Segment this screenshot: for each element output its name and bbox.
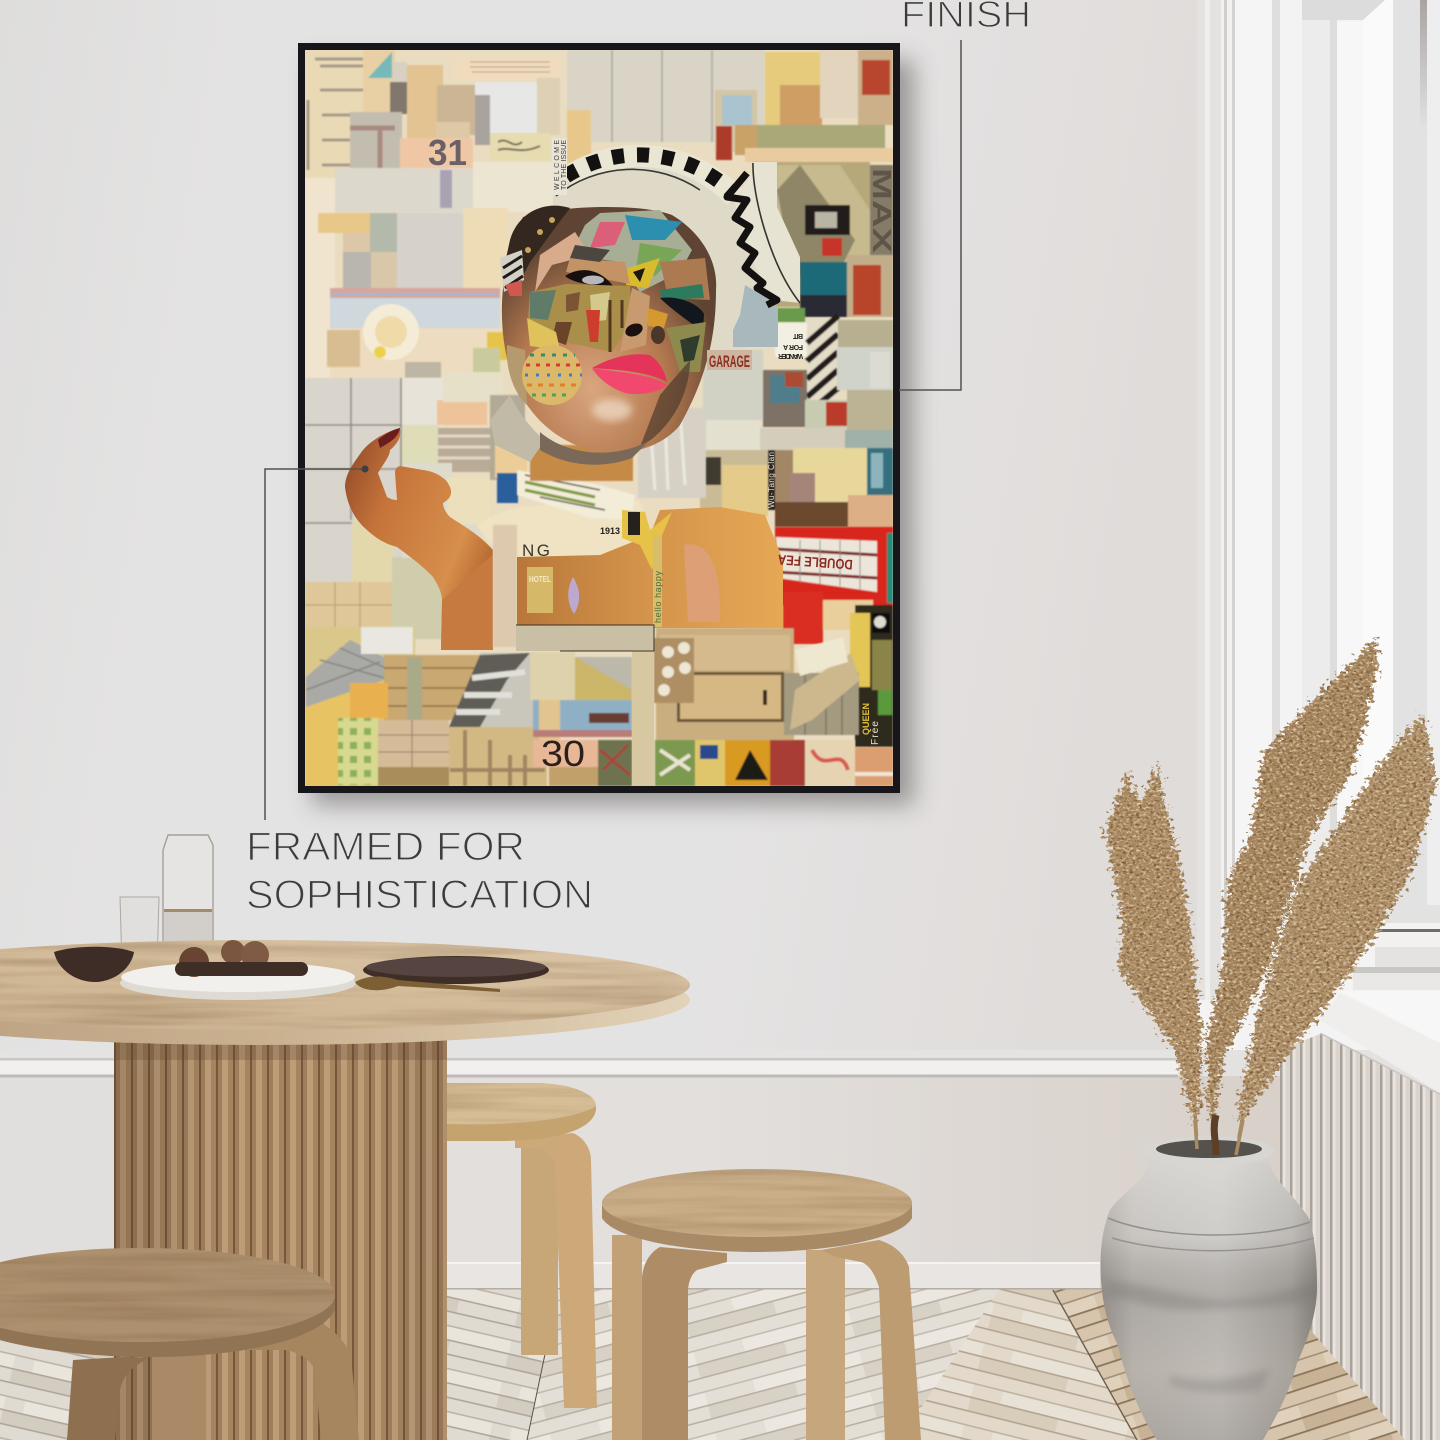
collage: right cog and zigzag teeth [727, 162, 800, 347]
collage artwork clipped to frame [305, 50, 897, 787]
collage: hand [345, 428, 493, 650]
collage: numbers and words: TO THE ISSUE [561, 140, 568, 190]
frond: centre [1205, 637, 1377, 1123]
collage: numbers and words: QUEEN [861, 703, 871, 735]
pampas grass [1105, 637, 1437, 1153]
collage: numbers and words: FOR A [783, 343, 803, 350]
tableware [54, 940, 549, 1000]
left eye [565, 270, 613, 286]
fluted pedestal [114, 1030, 447, 1440]
collage: face portrait [490, 206, 716, 465]
dark plate [363, 956, 549, 984]
collage: numbers and words: NG [522, 541, 550, 560]
front right stool [602, 1169, 921, 1440]
lower wall and rail [0, 1050, 1285, 1290]
frond: right [1237, 713, 1437, 1123]
sprinkle cheek [522, 345, 582, 405]
collage: big cog wheel [553, 145, 768, 368]
nuts [179, 947, 209, 977]
collage: lower band papers [305, 627, 893, 787]
callout: finish [899, 0, 1031, 390]
collage: numbers and words: Wu-Tang Clan [767, 452, 776, 508]
back stool [447, 1083, 597, 1408]
collage: double feature marquee [775, 527, 893, 747]
collage: numbers and words: 31 [428, 132, 467, 173]
radiator [1280, 1034, 1440, 1440]
frond: left [1105, 763, 1202, 1123]
collage: numbers and words [428, 132, 897, 774]
framed collage artwork [298, 43, 900, 793]
bowl [54, 947, 134, 982]
lips [592, 354, 667, 382]
collage: numbers and words: WANDER [778, 352, 803, 359]
marble board [120, 966, 356, 1000]
collage: tiles and left panels [305, 372, 527, 677]
collage: numbers and words: BIT [792, 332, 803, 339]
collage: upper left papers [305, 50, 765, 378]
nose and right eye area [620, 288, 650, 352]
callout: framed for sophistication: SOPHISTICATION [246, 873, 593, 917]
collage: neckline papers [477, 408, 706, 647]
collage: numbers and words: 1913 [600, 526, 620, 536]
glass pitcher and tumbler [120, 835, 213, 967]
collage: numbers and words: MAX [867, 168, 897, 254]
ceramic vase [1101, 1115, 1317, 1440]
front left stool [0, 1248, 359, 1440]
callout: framed for sophistication: FRAMED FOR [246, 825, 525, 869]
graffiti forehead mosaic [570, 210, 692, 292]
collage: numbers and words: DOUBLE FEA [777, 552, 853, 573]
stems [1194, 1090, 1245, 1153]
collage: numbers and words: Free [870, 721, 881, 745]
collage: numbers and words: hello happy [653, 570, 663, 623]
black frame [298, 43, 900, 793]
collage: numbers and words: HOTEL [529, 575, 551, 584]
window sill and books [1320, 905, 1440, 1095]
collage: right column papers [697, 50, 893, 533]
collage: numbers and words: WELCOME [554, 140, 561, 190]
wall [0, 0, 1200, 1060]
callout: framed for sophistication [246, 466, 593, 917]
spoon [355, 976, 500, 992]
round table top [0, 940, 690, 1045]
collage: numbers and words: 30 [541, 733, 585, 774]
tear mosaic [528, 284, 632, 352]
window frame and trim [1197, 0, 1440, 1050]
collage: torso [516, 507, 783, 786]
collage: numbers and words: GARAGE [709, 352, 750, 371]
artwork shadow [312, 60, 914, 805]
hair [506, 206, 570, 275]
chin highlight [592, 399, 632, 421]
herringbone floor [0, 1288, 1440, 1440]
